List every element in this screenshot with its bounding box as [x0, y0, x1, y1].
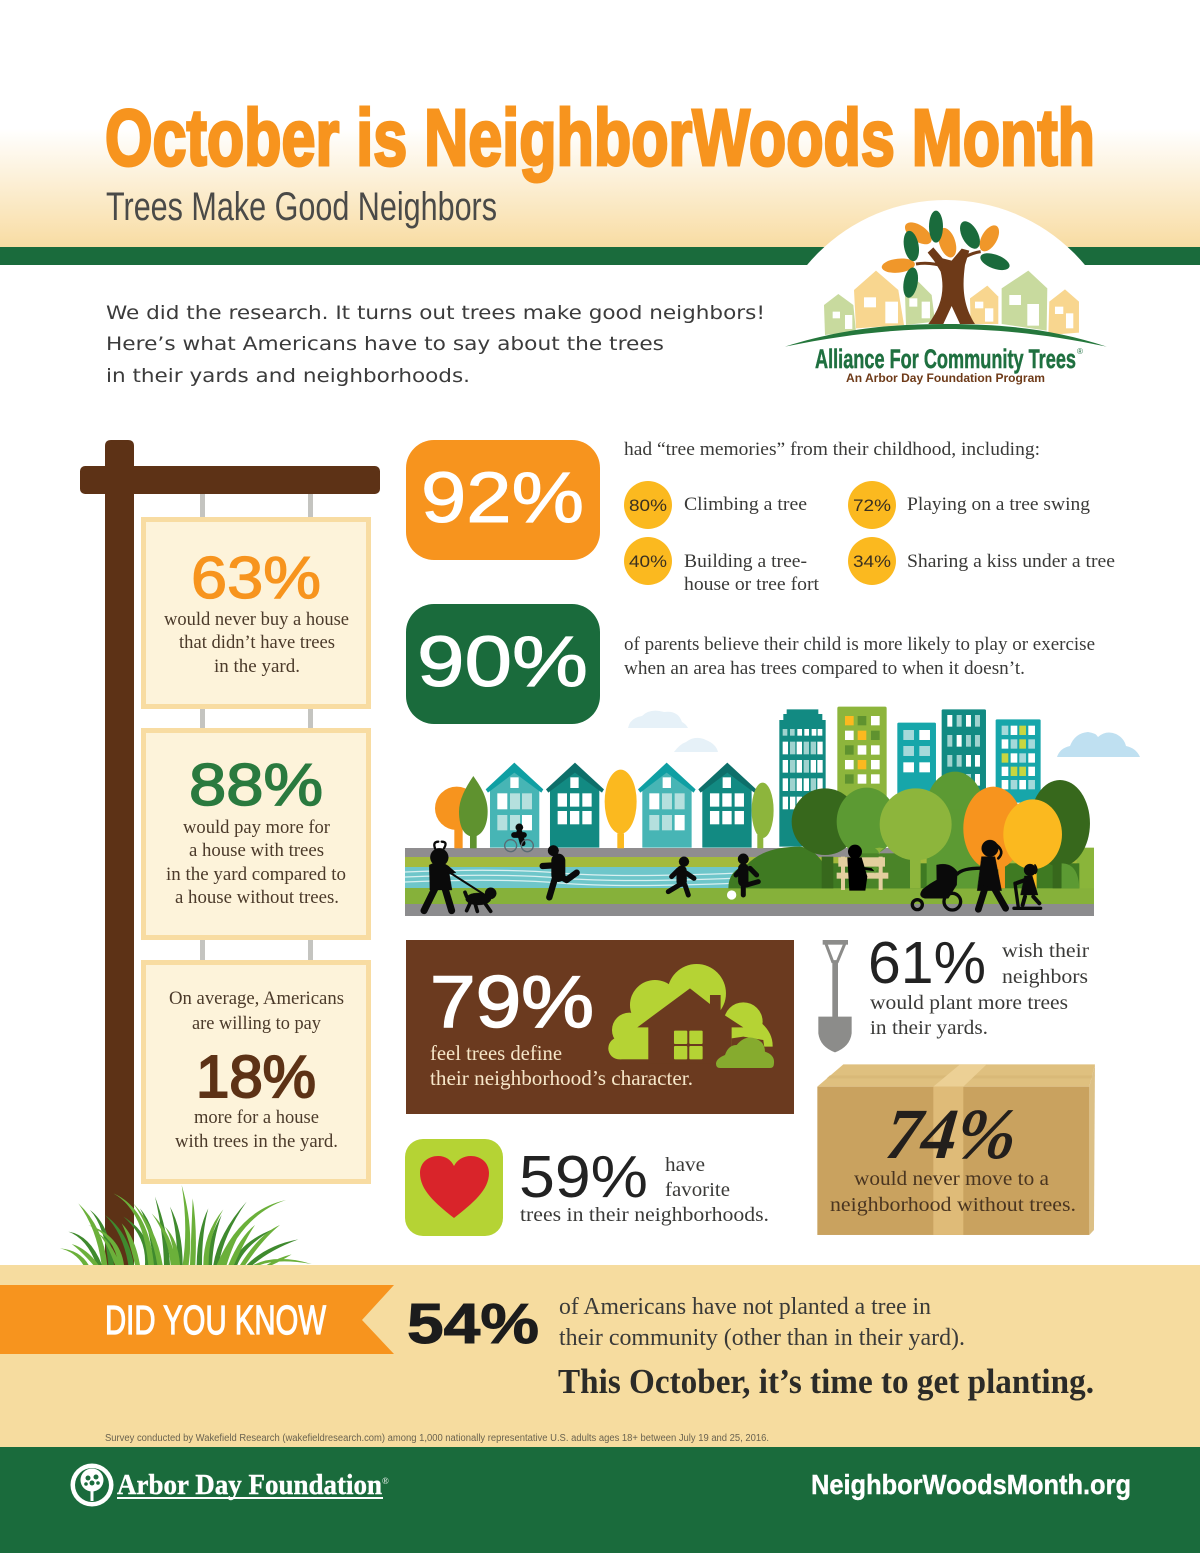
stat: 61% with shovel: in their yards.: [870, 1017, 988, 1039]
tree memories list: Building a tree-: [684, 551, 807, 572]
signpost: [80, 440, 380, 1265]
Arbor Day Foundation wordmark: Arbor Day Foundation: [117, 1469, 382, 1501]
text: parents: of parents believe their child is more likely to play or exercise: [624, 634, 1095, 655]
Arbor Day Foundation wordmark: ®: [382, 1476, 389, 1486]
intro text: We did the research. It turns out trees make good neighbors!: [106, 302, 765, 324]
text: parents: [624, 634, 1095, 679]
sign panel: 88%: [144, 730, 368, 938]
did you know band: Survey conducted by Wakefield Research (wakefieldresearch.com) among 1,000 nationally representative U.S. adults ages 18+ between July 19 and 25, 2016.: [105, 1433, 769, 1444]
tree memories list: [624, 439, 1115, 595]
sign panel: 18%: 18%: [196, 1044, 316, 1110]
intro text: Here’s what Americans have to say about the trees: [106, 333, 664, 355]
neighborhood illustration: [405, 707, 1140, 916]
tree memories list: 40%: [629, 552, 667, 571]
orange ribbon: DID YOU KNOW: [105, 1297, 326, 1343]
sign panel: 88%: a house without trees.: [175, 887, 339, 908]
did you know band: [0, 1265, 1200, 1447]
stat: 59% favorite trees: trees in their neighborhoods.: [520, 1204, 769, 1226]
footer: [0, 1447, 1200, 1553]
logo: Alliance for Community Trees: An Arbor Day Foundation Program: [846, 371, 1045, 385]
stat: 92%: [406, 440, 600, 560]
icon: heart: [405, 1139, 503, 1236]
did you know band: of Americans have not planted a tree in: [559, 1294, 931, 1320]
dog walker and dog: [424, 842, 496, 911]
bench with sitting person: [837, 845, 888, 891]
stat: 74% moving box: [817, 1064, 1095, 1235]
sign panel: 88%: a house with trees: [189, 840, 324, 861]
houses and street trees: [435, 763, 774, 848]
icon: Arbor Day tree: [70, 1464, 114, 1506]
stat: 90%: [406, 604, 600, 724]
sign panel: 18%: On average, Americans: [169, 988, 344, 1009]
stat: 79%: [406, 940, 794, 1114]
sign panel: 63%: 63%: [191, 545, 321, 611]
logo: Alliance for Community Trees: ®: [1077, 347, 1083, 356]
cyclist: [505, 824, 533, 852]
stat: 61% with shovel: wish their: [1002, 940, 1089, 962]
did you know band: 54%: [407, 1292, 539, 1356]
tree memories list: Sharing a kiss under a tree: [907, 551, 1115, 572]
sign panel: 18%: more for a house: [194, 1107, 319, 1128]
stat: 79%: their neighborhood’s character.: [430, 1066, 693, 1090]
ground, path and river: [405, 848, 1094, 916]
buildings: [779, 707, 1041, 847]
clouds: [628, 711, 1140, 757]
website: NeighborWoodsMonth.org: [811, 1469, 1131, 1500]
logo: Alliance for Community Trees: Alliance For Community Trees: [815, 344, 1076, 374]
stat: 61% with shovel: neighbors: [1002, 966, 1088, 988]
tree memories list: house or tree fort: [684, 574, 820, 595]
tree memories list: had “tree memories” from their childhood, including:: [624, 439, 1040, 460]
stat: 74% moving box: neighborhood without trees.: [830, 1194, 1076, 1216]
tree memories list: Playing on a tree swing: [907, 494, 1091, 515]
sign panel: 88%: in the yard compared to: [166, 864, 346, 885]
tree memories list: 80%: [629, 496, 667, 515]
stat: 59% favorite trees: have: [665, 1154, 705, 1176]
stat: 59% favorite trees: favorite: [665, 1179, 730, 1201]
sign panel: 63%: [144, 520, 368, 706]
stat: 79%: 79%: [430, 962, 594, 1043]
grass: [60, 1185, 312, 1265]
stat: 61% with shovel: [818, 930, 1089, 1052]
orange ribbon: [0, 1285, 394, 1354]
runners: [543, 845, 758, 900]
stat: 61% with shovel: would plant more trees: [870, 992, 1068, 1014]
tree memories list: Climbing a tree: [684, 494, 807, 515]
icon: shovel: [818, 940, 852, 1052]
tree memories list: 72%: [853, 496, 891, 515]
sign panel: 88%: would pay more for: [183, 817, 331, 838]
sign panel: 18%: are willing to pay: [192, 1013, 321, 1034]
intro text: [106, 302, 765, 387]
stat: 92%: 92%: [421, 459, 584, 538]
logo: Alliance for Community Trees: [785, 211, 1107, 385]
intro text: in their yards and neighborhoods.: [106, 365, 470, 387]
text: parents: when an area has trees compared to when it doesn’t.: [624, 658, 1025, 679]
people silhouettes: [424, 824, 758, 911]
stat: 59% favorite trees: [405, 1139, 769, 1236]
sign panel: 88%: 88%: [189, 752, 323, 818]
did you know band: their community (other than in their yard).: [559, 1325, 965, 1351]
stat: 74% moving box: would never move to a: [854, 1168, 1049, 1190]
did you know band: This October, it’s time to get planting.: [558, 1362, 1094, 1401]
sign panel: 18%: [144, 962, 368, 1182]
stat: 59% favorite trees: 59%: [519, 1144, 648, 1210]
sign panel: 63%: in the yard.: [214, 656, 300, 677]
sign panel: 63%: that didn’t have trees: [179, 632, 335, 653]
sign panel: 63%: would never buy a house: [164, 609, 349, 630]
subtitle: Trees Make Good Neighbors: [106, 185, 497, 229]
park trees: [728, 772, 1094, 888]
header background: [0, 0, 1200, 562]
icon: house and trees: [608, 964, 774, 1068]
tree memories list: 34%: [853, 552, 891, 571]
stat: 74% moving box: 74%: [882, 1094, 1021, 1174]
stat: 79%: feel trees define: [430, 1041, 562, 1065]
sign panel: 18%: with trees in the yard.: [175, 1131, 338, 1152]
stat: 61% with shovel: 61%: [868, 930, 986, 996]
stat: 90%: 90%: [417, 623, 588, 702]
mother with stroller and child on scooter: [912, 840, 1041, 910]
